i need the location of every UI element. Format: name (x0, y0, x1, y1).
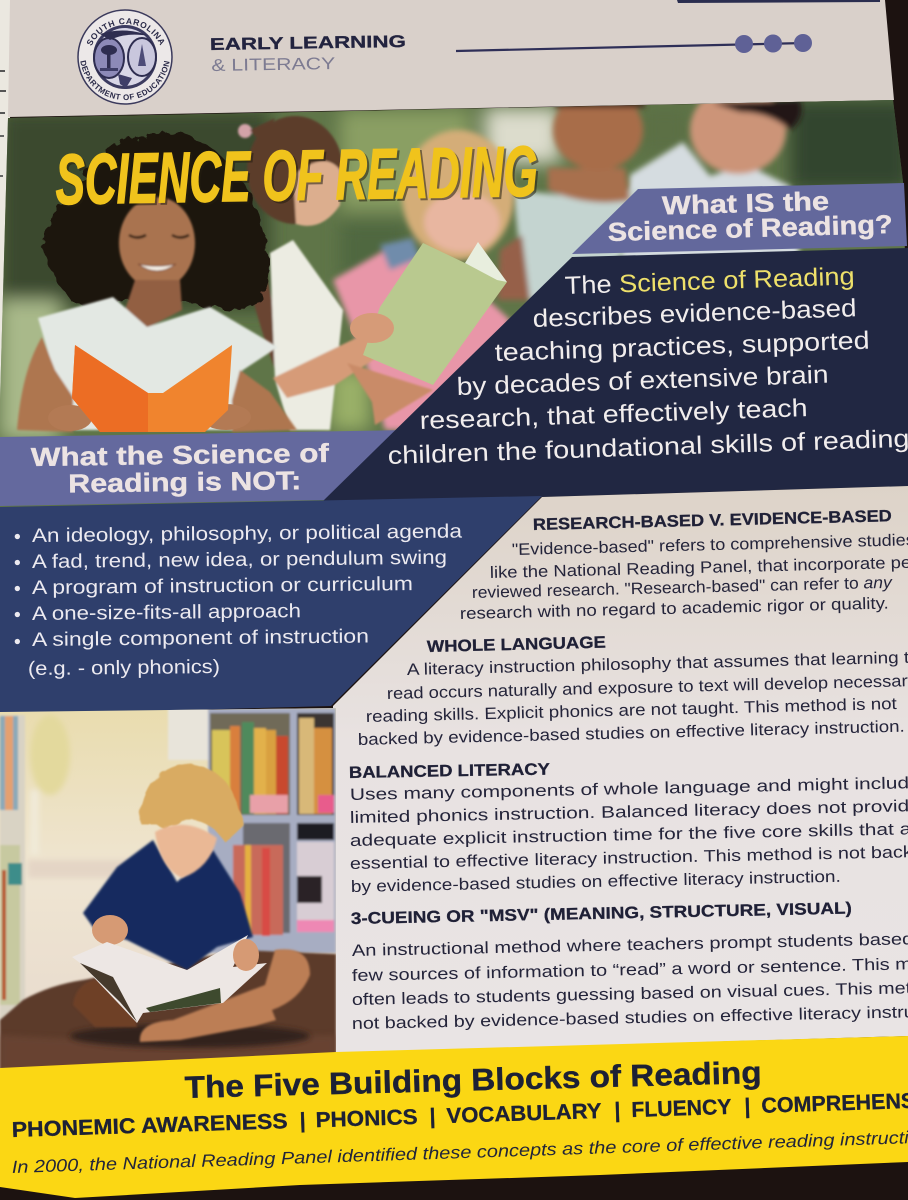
title: Science of Reading: SCIENCE OF READING (55, 133, 538, 220)
title: Science of Reading: SCIENCE OF READING (57, 135, 540, 222)
definition text (387, 262, 908, 470)
definition text: children the foundational skills of reading (387, 425, 908, 470)
logo: state department of education seal (77, 9, 173, 105)
bullet list: A program of instruction or curriculum (32, 573, 413, 599)
text block: whole language: A literacy instruction philosophy that assumes that learning to (407, 648, 908, 679)
top right edge strip (677, 0, 880, 3)
five skills list: VOCABULARY (446, 1099, 602, 1128)
bullet list: (e.g. - only phonics) (28, 656, 220, 680)
text block: balanced literacy: BALANCED LITERACY (349, 760, 550, 782)
boy (72, 763, 310, 1042)
five skills list: | (744, 1094, 751, 1118)
timeline line with three dots (456, 34, 812, 53)
bullet list: • (14, 526, 21, 548)
bullet list (14, 520, 462, 680)
right boy (620, 86, 802, 260)
bullet list: An ideology, philosophy, or political agenda (32, 520, 462, 547)
organisation name: EARLY LEARNING (210, 32, 406, 54)
panel: what is the science of reading heading: Science of Reading? (607, 209, 893, 247)
text block: 3-cueing or msv (351, 900, 908, 1033)
dark-skinned boy (496, 105, 648, 303)
bullet list: • (14, 604, 21, 626)
text block: research-based v. evidence-based: RESEARCH-BASED V. EVIDENCE-BASED (533, 507, 892, 534)
hand (92, 915, 128, 945)
logo: state department of education seal: SOUTH CAROLINA (87, 18, 164, 46)
hair (140, 763, 243, 842)
panel: list of what it is not (0, 496, 542, 715)
text block: whole language (358, 634, 908, 749)
body paper panel (333, 486, 908, 1053)
legs (73, 979, 137, 1027)
text block: balanced literacy: essential to effective literacy instruction. This method is not backed (350, 843, 908, 873)
five skills list: | (614, 1098, 621, 1123)
text block: balanced literacy: Uses many components of whole language and might include (350, 774, 908, 804)
text block: research-based v. evidence-based (460, 507, 908, 623)
bullet list: A fad, trend, new idea, or pendulum swing (32, 547, 447, 573)
text block: research-based v. evidence-based: like the National Reading Panel, that incorporate peer- (490, 553, 908, 582)
lamp shape on wall (28, 715, 123, 878)
bullet list: • (14, 631, 21, 653)
bullet list: • (14, 578, 21, 600)
five skills list: PHONICS (315, 1105, 418, 1132)
text block: 3-cueing or msv: often leads to students guessing based on visual cues. This method is (352, 978, 908, 1009)
text block: research-based v. evidence-based: "Evidence-based" refers to comprehensive studies, (512, 531, 908, 559)
green book (363, 242, 507, 385)
left shelf (0, 715, 25, 1025)
text block: 3-cueing or msv: not backed by evidence-based studies on effective literacy instruction. (352, 1002, 908, 1033)
text block: whole language: read occurs naturally and exposure to text will develop necessary (387, 672, 908, 703)
floor (0, 950, 336, 1075)
bullet list: A one-size-fits-all approach (32, 600, 301, 625)
text block: 3-cueing or msv: An instructional method where teachers prompt students based on a (352, 929, 908, 960)
five skills list: | (299, 1109, 306, 1133)
text block: research-based v. evidence-based: research with no regard to academic rigor or quality. (460, 595, 889, 623)
panel: what the science of reading is not heading: What the Science of (31, 438, 329, 472)
text block: balanced literacy (349, 760, 908, 896)
hero photo: children reading outdoors (0, 86, 908, 525)
banner: five building blocks of reading (0, 1036, 908, 1198)
blonde girl (333, 130, 514, 430)
definition text: The Science of Reading (564, 262, 855, 300)
five skills list (11, 1088, 908, 1142)
organisation name (210, 32, 406, 75)
first girl with curly hair (17, 132, 297, 432)
panel: definition of the science of reading (323, 248, 908, 501)
definition text: teaching practices, supported (494, 327, 870, 367)
definition text: research, that effectively teach (419, 394, 808, 435)
book (72, 935, 267, 1023)
shirt (83, 840, 253, 970)
second girl with ponytail (238, 116, 433, 430)
banner heading: The Five Building Blocks of Reading (184, 1055, 762, 1105)
panel: what is the science of reading heading: What IS the (662, 186, 829, 220)
organisation name: & LITERACY (211, 54, 335, 75)
text block: 3-cueing or msv: few sources of information to “read” a word or sentence. This method (352, 954, 908, 985)
header band (8, 0, 894, 117)
five skills list: FLUENCY (631, 1095, 732, 1122)
text block: balanced literacy: by evidence-based studies on effective literacy instruction. (351, 868, 841, 896)
text block: research-based v. evidence-based: reviewed research. "Research-based" can refer to any (472, 574, 894, 602)
face (155, 825, 217, 878)
panel: what is the science of reading heading (572, 183, 907, 254)
bullet list: A single component of instruction (32, 625, 369, 651)
book page at left edge (0, 0, 14, 420)
banner caption: In 2000, the National Reading Panel identified these concepts as the core of effective reading instruction. (11, 1126, 908, 1177)
photo: boy reading among bookshelves (0, 708, 340, 1078)
logo: state department of education seal: DEPARTMENT OF EDUCATION (80, 60, 170, 100)
definition text: by decades of extensive brain (456, 361, 829, 401)
text block: 3-cueing or msv: 3-CUEING OR "MSV" (MEANING, STRUCTURE, VISUAL) (351, 900, 852, 928)
title: Science of Reading (55, 133, 540, 222)
text block: whole language: backed by evidence-based studies on effective literacy instruction. (358, 718, 905, 749)
text block: balanced literacy: adequate explicit instruction time for the five core skills that are (350, 820, 908, 850)
text block: whole language: reading skills. Explicit phonics are not taught. This method is not (366, 695, 897, 726)
bullet list: • (14, 552, 21, 574)
five skills list: PHONEMIC AWARENESS (11, 1109, 288, 1142)
five skills list: | (429, 1104, 436, 1129)
definition text: describes evidence-based (532, 294, 857, 333)
text block: whole language: WHOLE LANGUAGE (427, 634, 606, 656)
orange book (72, 345, 232, 432)
panel: what the science of reading is not heading: Reading is NOT: (68, 465, 301, 498)
text block: balanced literacy: limited phonics instruction. Balanced literacy does not provide (350, 797, 908, 827)
panel: what the science of reading is not heading (0, 430, 410, 506)
bookshelf (168, 708, 336, 953)
